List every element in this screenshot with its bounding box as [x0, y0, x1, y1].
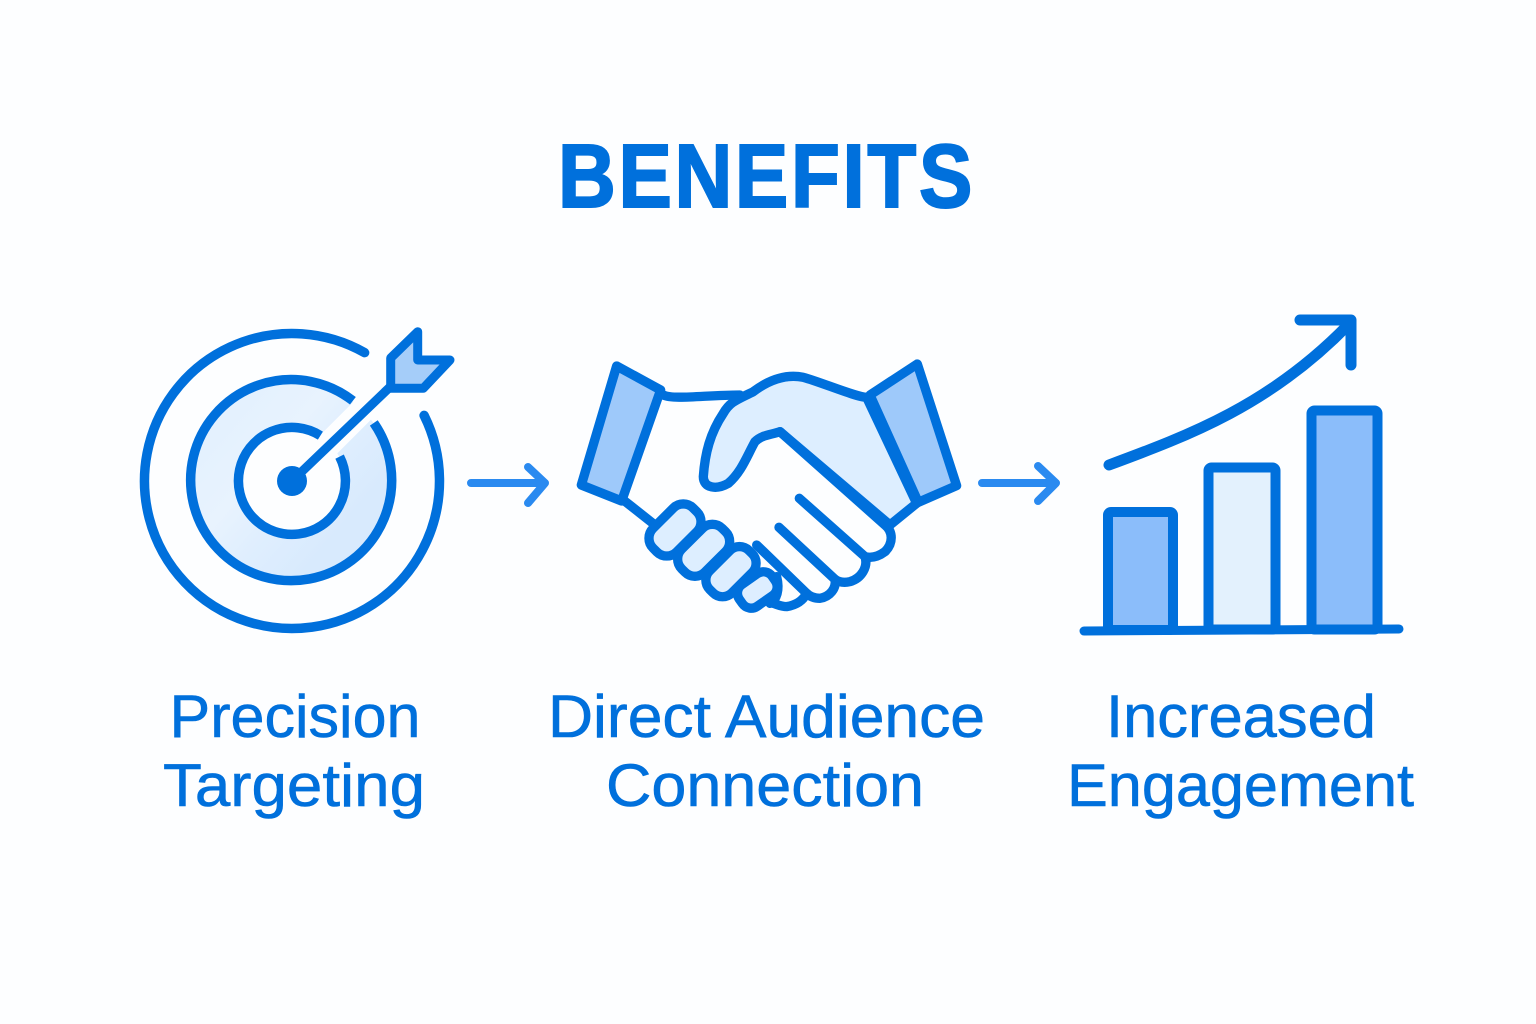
label: increased engagement: Engagement [1067, 752, 1414, 819]
right hand [703, 376, 917, 525]
inner ring [238, 427, 345, 534]
baseline [1084, 629, 1399, 631]
finger pills [643, 498, 707, 562]
label: direct audience connection [548, 683, 985, 819]
arrow fletching [391, 332, 450, 388]
label: increased engagement [1067, 683, 1414, 819]
target shaded ring [192, 381, 392, 581]
label: direct audience connection: Direct Audience [548, 683, 985, 750]
rising arrow [1109, 325, 1348, 465]
label: increased engagement: Increased [1106, 683, 1376, 750]
arrow: handshake to chart [982, 466, 1056, 501]
bullseye [277, 466, 307, 496]
outer ring [144, 333, 439, 628]
finger lines [780, 432, 891, 557]
middle bar [1208, 468, 1276, 630]
title: BENEFITS [558, 127, 975, 227]
label: precision targeting [163, 683, 425, 819]
left cuff [581, 366, 661, 501]
icon: bar chart with rising arrow [1084, 320, 1399, 631]
right cuff [870, 364, 957, 502]
label: direct audience connection: Connection [606, 752, 924, 819]
icon: handshake [581, 364, 957, 612]
label: precision targeting: Precision [170, 683, 420, 750]
arrow shaft [292, 387, 390, 481]
arrowhead [1300, 320, 1351, 365]
arrow: target to handshake [471, 467, 545, 503]
icon: target with arrow [144, 332, 450, 628]
short bar [1108, 512, 1173, 630]
label: precision targeting: Targeting [163, 752, 425, 819]
middle ring [191, 380, 392, 581]
target centre [239, 428, 345, 534]
tall bar [1312, 410, 1378, 630]
gap along arrow shaft [292, 395, 378, 481]
left hand [623, 395, 893, 607]
